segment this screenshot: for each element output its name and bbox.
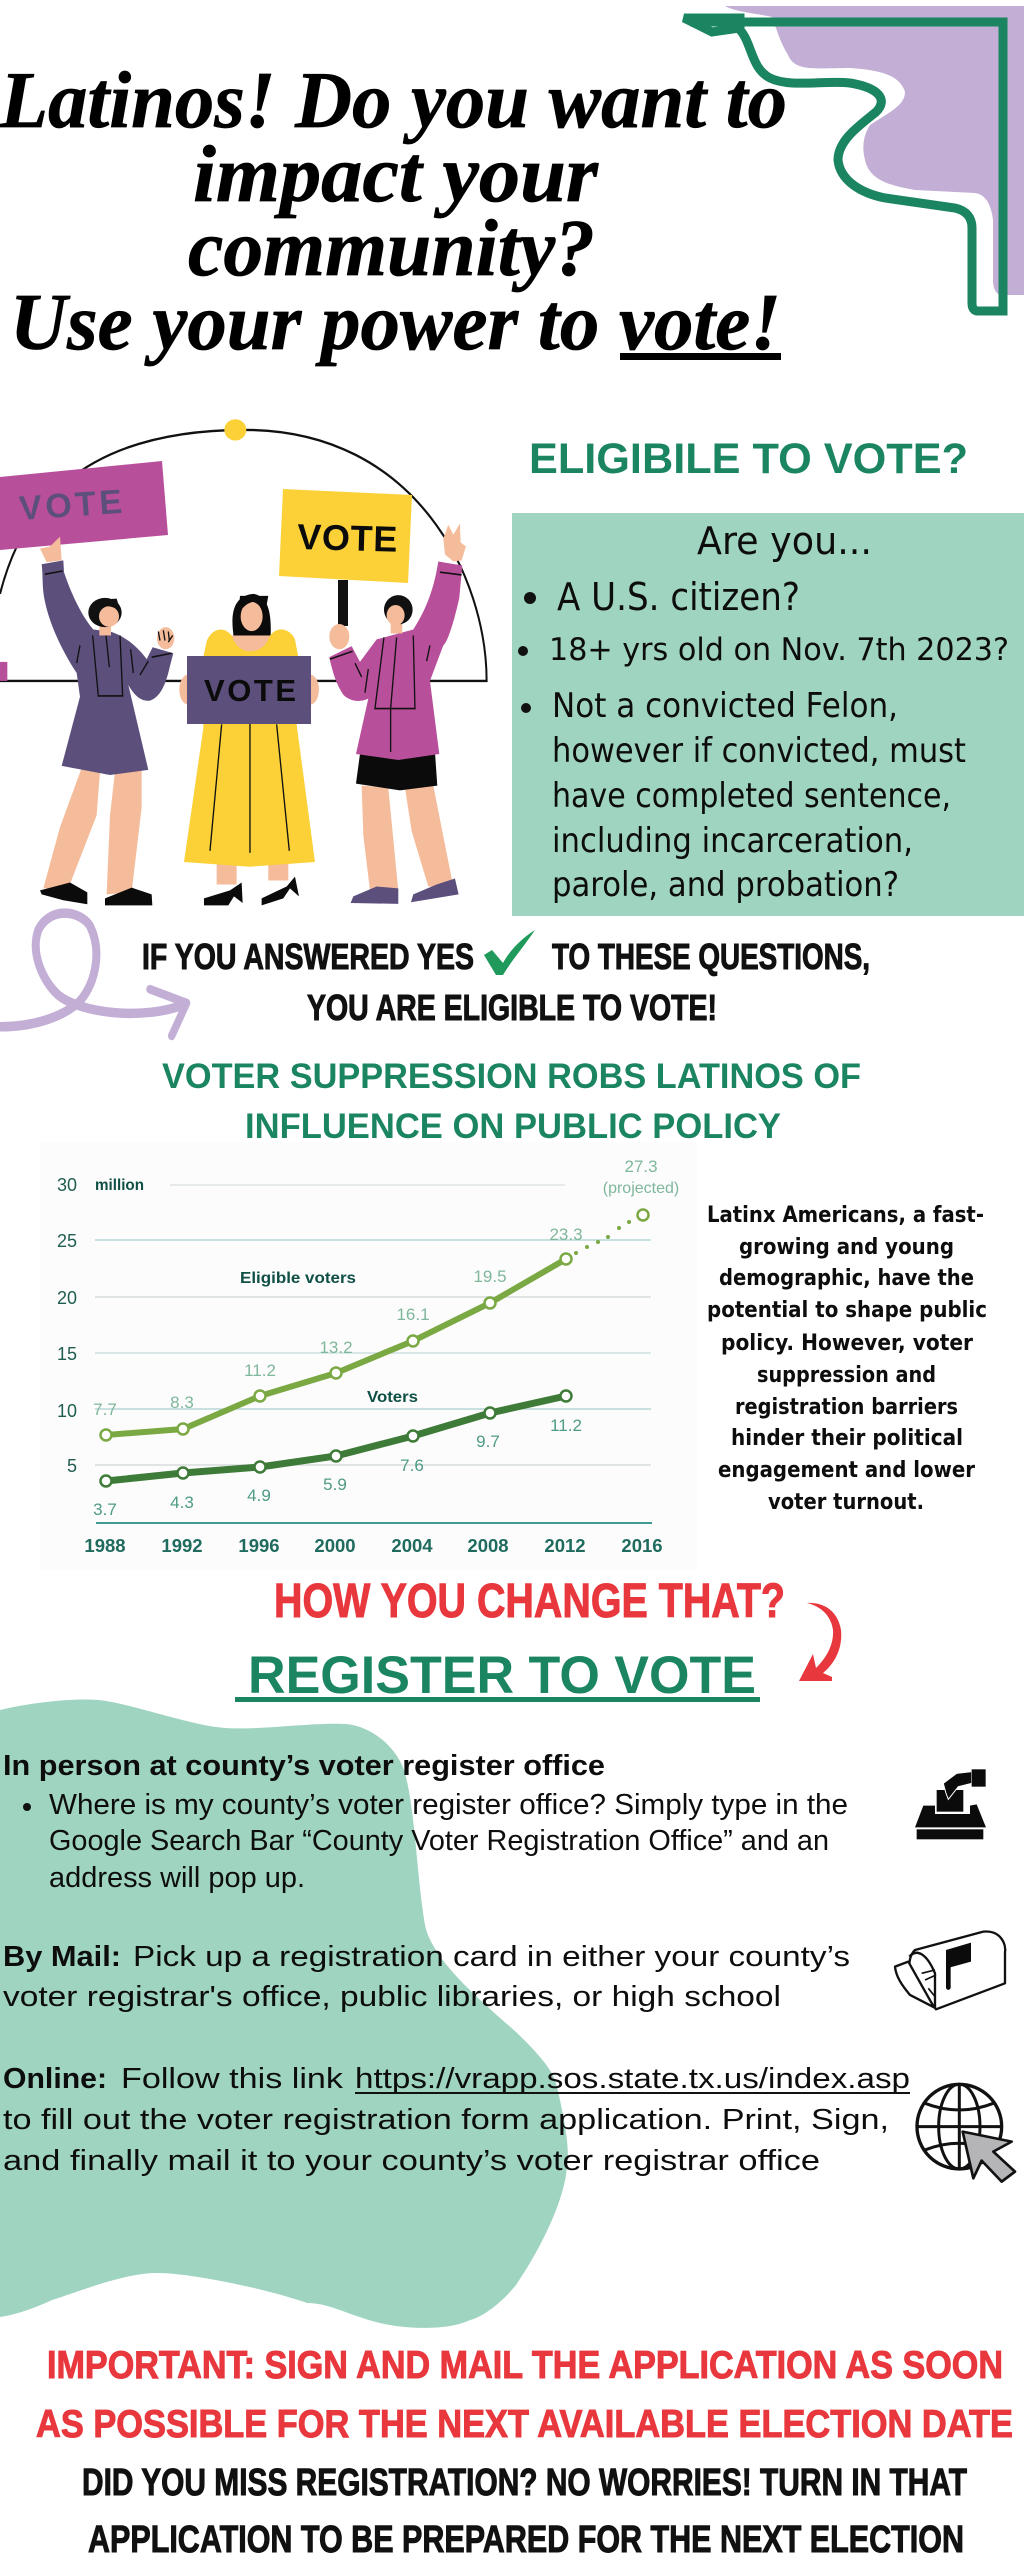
- series: voters: 5.9: [323, 1475, 347, 1494]
- x axis labels: 1988: [84, 1535, 126, 1556]
- semicircle backdrop: [0, 419, 487, 681]
- sign: yellow vote: [279, 489, 412, 626]
- x axis labels: 2012: [544, 1535, 586, 1556]
- text block: online: https://vrapp.sos.state.tx.us/index.asp: [355, 2063, 910, 2095]
- figure: woman in yellow dress: [179, 594, 319, 905]
- x axis labels: 1996: [238, 1535, 280, 1556]
- heading: voter suppression: VOTER SUPPRESSION ROBS LATINOS OF: [162, 1057, 861, 1096]
- heading: how you change that: HOW YOU CHANGE THAT?: [274, 1575, 785, 1628]
- arrow: lavender ribbon: [0, 913, 187, 1036]
- series: voters: [93, 1389, 582, 1519]
- series: eligible voters: 23.3: [549, 1225, 583, 1244]
- title: [0, 57, 787, 367]
- icon: green check: [484, 930, 535, 975]
- text block: by mail: By Mail:: [3, 1941, 121, 1973]
- callout: if you answered yes: IF YOU ANSWERED YES: [142, 936, 474, 977]
- series: eligible voters: 7.7: [93, 1400, 117, 1419]
- icon: mailbox: [895, 1932, 1005, 2009]
- text block: online: and finally mail it to your county’s voter registrar office: [3, 2145, 820, 2177]
- series: voters: 9.7: [476, 1432, 500, 1451]
- sign: magenta vote: [0, 461, 168, 550]
- text block: Latinx Americans: voter turnout.: [768, 1490, 924, 1515]
- line chart: eligible voters and voters: [40, 1142, 697, 1570]
- text block: by mail: Pick up a registration card in either your county’s: [133, 1941, 850, 1973]
- series: voters: 4.9: [247, 1486, 271, 1505]
- series: eligible voters: 16.1: [396, 1305, 430, 1324]
- callout: did you miss registration: [82, 2462, 967, 2560]
- callout: if you answered yes: [142, 930, 870, 1028]
- text block: online: Follow this link: [121, 2063, 344, 2095]
- y axis labels: 5: [67, 1456, 77, 1476]
- arrow: red curved: [799, 1603, 841, 1681]
- heading: eligible to vote: ELIGIBILE TO VOTE?: [529, 435, 968, 483]
- icon: ballot box: [915, 1769, 986, 1839]
- decorative corner: green outline: [684, 18, 1003, 311]
- text block: Latinx Americans: demographic, have the: [719, 1266, 974, 1291]
- sign: yellow vote: VOTE: [297, 516, 398, 560]
- text block: online: to fill out the voter registration form application. Print, Sign,: [3, 2104, 889, 2136]
- sign: purple vote: VOTE: [204, 673, 296, 708]
- x axis labels: 2008: [467, 1535, 509, 1556]
- text block: online: [3, 2063, 910, 2177]
- panel: eligibility questions: 18+ yrs old on Nov. 7th 2023?: [549, 632, 1009, 668]
- panel: eligibility questions: have completed sentence,: [552, 776, 951, 816]
- text block: Latinx Americans: hinder their political: [731, 1426, 963, 1451]
- series: voters: 3.7: [93, 1500, 117, 1519]
- panel: eligibility questions: including incarceration,: [552, 821, 913, 861]
- illustration: three voters holding signs: [0, 419, 487, 905]
- series: voters: 11.2: [550, 1416, 582, 1435]
- panel: eligibility questions: [512, 513, 1024, 916]
- series: voters: Voters: [367, 1389, 418, 1406]
- text block: Latinx Americans: registration barriers: [735, 1395, 958, 1420]
- blob: mint background: [0, 1700, 568, 2328]
- y axis labels: [57, 1175, 144, 1476]
- x axis labels: 2000: [314, 1535, 356, 1556]
- icon: globe with cursor: [917, 2084, 1015, 2182]
- callout: important: [36, 2344, 1013, 2446]
- callout: if you answered yes: TO THESE QUESTIONS,: [552, 936, 870, 977]
- y axis labels: 20: [57, 1288, 77, 1308]
- x axis labels: 2016: [621, 1535, 663, 1556]
- series: eligible voters: 11.2: [244, 1361, 276, 1380]
- text block: Latinx Americans: Latinx Americans, a fast-: [707, 1203, 984, 1228]
- decorative corner: lavender shape: [725, 6, 1024, 295]
- series: eligible voters: [93, 1157, 679, 1440]
- series: eligible voters: 27.3: [624, 1157, 658, 1176]
- text block: in person: Where is my county’s voter register office? Simply type in the: [49, 1789, 848, 1821]
- text block: in person: address will pop up.: [49, 1862, 305, 1894]
- callout: if you answered yes: YOU ARE ELIGIBLE TO VOTE!: [307, 987, 717, 1028]
- title: Latinos! Do you want to: [0, 57, 787, 145]
- figure: person in magenta shirt: [329, 524, 466, 904]
- x axis labels: 2004: [391, 1535, 433, 1556]
- sign: magenta vote: VOTE: [18, 483, 123, 528]
- series: eligible voters: (projected): [603, 1180, 679, 1197]
- panel: eligibility questions: A U.S. citizen?: [557, 575, 800, 619]
- panel: eligibility questions: Are you...: [697, 519, 872, 563]
- sign: purple vote: [187, 656, 311, 724]
- heading: register to vote: REGISTER TO VOTE: [248, 1646, 756, 1705]
- series: eligible voters: 8.3: [170, 1393, 194, 1412]
- x axis labels: 1992: [161, 1535, 203, 1556]
- text block: Latinx Americans: suppression and: [757, 1363, 936, 1388]
- panel: eligibility questions: parole, and probation?: [552, 865, 899, 905]
- heading: voter suppression: [162, 1057, 861, 1146]
- text block: Latinx Americans: [707, 1203, 987, 1515]
- text block: online: Online:: [3, 2063, 107, 2095]
- text block: by mail: voter registrar's office, public libraries, or high school: [3, 1981, 781, 2013]
- y axis labels: 15: [57, 1344, 77, 1364]
- series: voters: 7.6: [400, 1456, 424, 1475]
- title: impact your: [193, 131, 599, 219]
- text block: in person: [3, 1750, 848, 1894]
- y axis labels: million: [95, 1177, 144, 1194]
- series: eligible voters: Eligible voters: [240, 1270, 356, 1287]
- panel: eligibility questions: Not a convicted Felon,: [552, 686, 898, 726]
- text block: in person: Google Search Bar “County Voter Registration Office” and an: [49, 1825, 829, 1857]
- y axis labels: 10: [57, 1401, 77, 1421]
- text block: Latinx Americans: potential to shape public: [707, 1298, 987, 1323]
- title: community?: [188, 205, 595, 293]
- heading: voter suppression: INFLUENCE ON PUBLIC POLICY: [245, 1107, 781, 1146]
- series: eligible voters: 19.5: [473, 1267, 507, 1286]
- text block: Latinx Americans: growing and young: [739, 1235, 954, 1260]
- text block: by mail: [3, 1941, 850, 2013]
- panel: eligibility questions: however if convicted, must: [552, 731, 966, 771]
- title: Use your power to vote!: [10, 279, 781, 367]
- x axis labels: [84, 1535, 663, 1556]
- y axis labels: 25: [57, 1231, 77, 1251]
- y axis labels: 30: [57, 1175, 77, 1195]
- text block: in person: In person at county’s voter register office: [3, 1750, 605, 1782]
- figure: woman in purple dress: [40, 537, 174, 905]
- text block: Latinx Americans: engagement and lower: [718, 1458, 975, 1483]
- series: eligible voters: 13.2: [319, 1338, 353, 1357]
- series: voters: 4.3: [170, 1493, 194, 1512]
- text block: Latinx Americans: policy. However, voter: [721, 1331, 973, 1356]
